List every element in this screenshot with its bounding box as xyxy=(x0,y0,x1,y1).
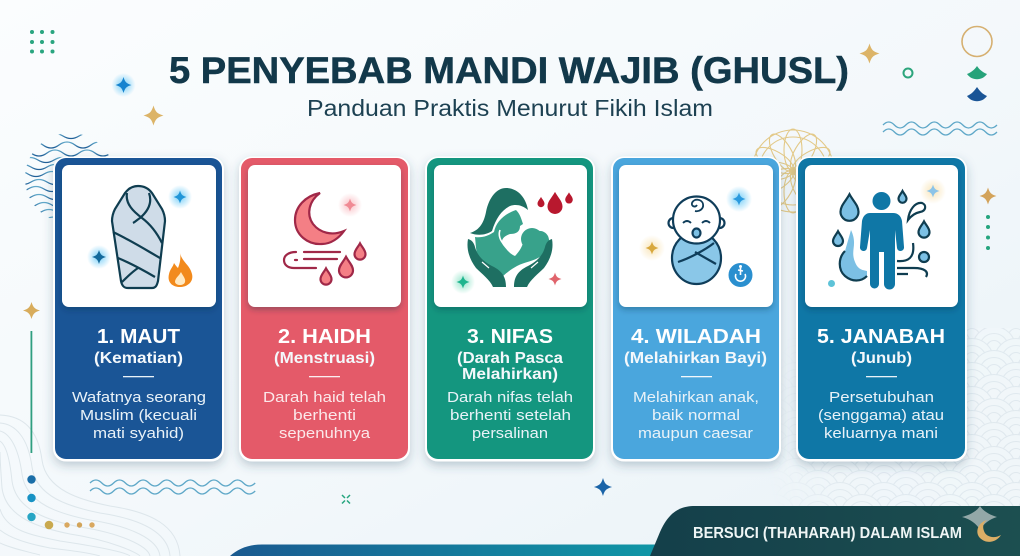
sparkle blue xyxy=(726,186,752,212)
sparkle blue xyxy=(168,185,192,209)
sparkle red xyxy=(548,272,562,286)
blue fan xyxy=(967,87,987,101)
bottom left dots xyxy=(27,475,95,529)
green ring xyxy=(904,68,912,78)
description: Melahirkan anak, xyxy=(633,389,759,406)
description: berhenti xyxy=(293,407,356,424)
subheading: (Melahirkan Bayi) xyxy=(624,350,767,367)
icon: birth badge xyxy=(728,263,752,287)
description: Darah haid telah xyxy=(263,389,386,406)
description: baik normal xyxy=(652,407,740,424)
heading: 1. MAUT xyxy=(97,326,180,348)
icon: flame xyxy=(169,253,192,287)
description: Wafatnya seorang xyxy=(72,389,206,406)
contour lines bottom left xyxy=(0,415,180,556)
description: Muslim (kecuali xyxy=(80,407,197,424)
card 1: maut xyxy=(53,156,224,462)
title: 5 PENYEBAB MANDI WAJIB (GHUSL) xyxy=(169,50,849,91)
description: Persetubuhan xyxy=(829,389,934,406)
icon: crescent moon xyxy=(295,193,344,244)
card 5: janabah xyxy=(796,156,967,462)
subheading: Melahirkan) xyxy=(462,366,558,383)
sparkle green xyxy=(451,270,475,294)
sparkle: gold top left xyxy=(144,106,164,126)
top right ornaments xyxy=(860,26,992,101)
icon: mother and baby xyxy=(467,188,553,287)
dot xyxy=(828,280,835,287)
footer banner xyxy=(650,506,1020,556)
green fan xyxy=(967,66,987,79)
footer emblem: diamond star and crescent xyxy=(962,506,1001,542)
wave circle top left of cards xyxy=(25,134,109,218)
icon: water drops and swirls xyxy=(833,191,930,281)
left gold sparkle and line xyxy=(23,302,40,453)
description xyxy=(72,389,206,442)
icon: wrapped shroud xyxy=(112,186,165,288)
footer text: BERSUCI (THAHARAH) DALAM ISLAM xyxy=(693,525,962,542)
card 2: haidh xyxy=(239,156,410,462)
sparkle gold xyxy=(639,235,665,261)
heading: 3. NIFAS xyxy=(467,326,553,348)
sparkle dark blue xyxy=(87,245,111,269)
subheading: (Menstruasi) xyxy=(274,350,375,367)
sparkle: blue top left xyxy=(112,73,136,97)
gold sparkle xyxy=(860,44,880,64)
heading: 5. JANABAH xyxy=(817,326,945,348)
icon: wind lines xyxy=(284,252,340,268)
gold ring xyxy=(962,26,992,56)
sparkle pink xyxy=(338,193,362,217)
card 4: wiladah xyxy=(611,156,781,462)
description: maupun caesar xyxy=(638,425,753,442)
description xyxy=(633,389,759,442)
gold mandala behind card 5 xyxy=(751,129,835,213)
description: berhenti setelah xyxy=(450,407,571,424)
description xyxy=(447,389,573,442)
subheading: (Darah Pasca xyxy=(457,350,563,367)
description: (senggama) atau xyxy=(818,407,944,424)
teal bottom band xyxy=(230,544,700,556)
dot grid top left xyxy=(30,30,54,54)
description xyxy=(818,389,944,442)
subheading: (Kematian) xyxy=(94,350,183,367)
icon: swaddled baby xyxy=(668,196,724,284)
description: keluarnya mani xyxy=(824,425,938,442)
card 3: nifas xyxy=(425,156,595,462)
blue sparkle bottom xyxy=(594,478,612,496)
subheading xyxy=(457,350,563,383)
description: Darah nifas telah xyxy=(447,389,573,406)
icon: blood drops xyxy=(320,243,366,285)
description: sepenuhnya xyxy=(279,425,371,442)
icon: blood drops xyxy=(538,192,573,214)
subtitle: Panduan Praktis Menurut Fikih Islam xyxy=(307,95,713,121)
sparkle light blue xyxy=(920,178,946,204)
subheading: (Junub) xyxy=(851,350,912,367)
heading: 2. HAIDH xyxy=(278,326,371,348)
wave pair top right xyxy=(883,122,997,135)
icon: person xyxy=(860,192,904,290)
description: mati syahid) xyxy=(93,425,184,442)
seigaiha pattern bottom right xyxy=(812,328,1020,506)
right gold sparkle and dots xyxy=(980,188,996,250)
description xyxy=(263,389,386,442)
wave pair bottom left xyxy=(90,480,255,494)
heading: 4. WILADAH xyxy=(631,326,761,348)
small green cross xyxy=(342,495,350,504)
description: persalinan xyxy=(472,425,548,442)
